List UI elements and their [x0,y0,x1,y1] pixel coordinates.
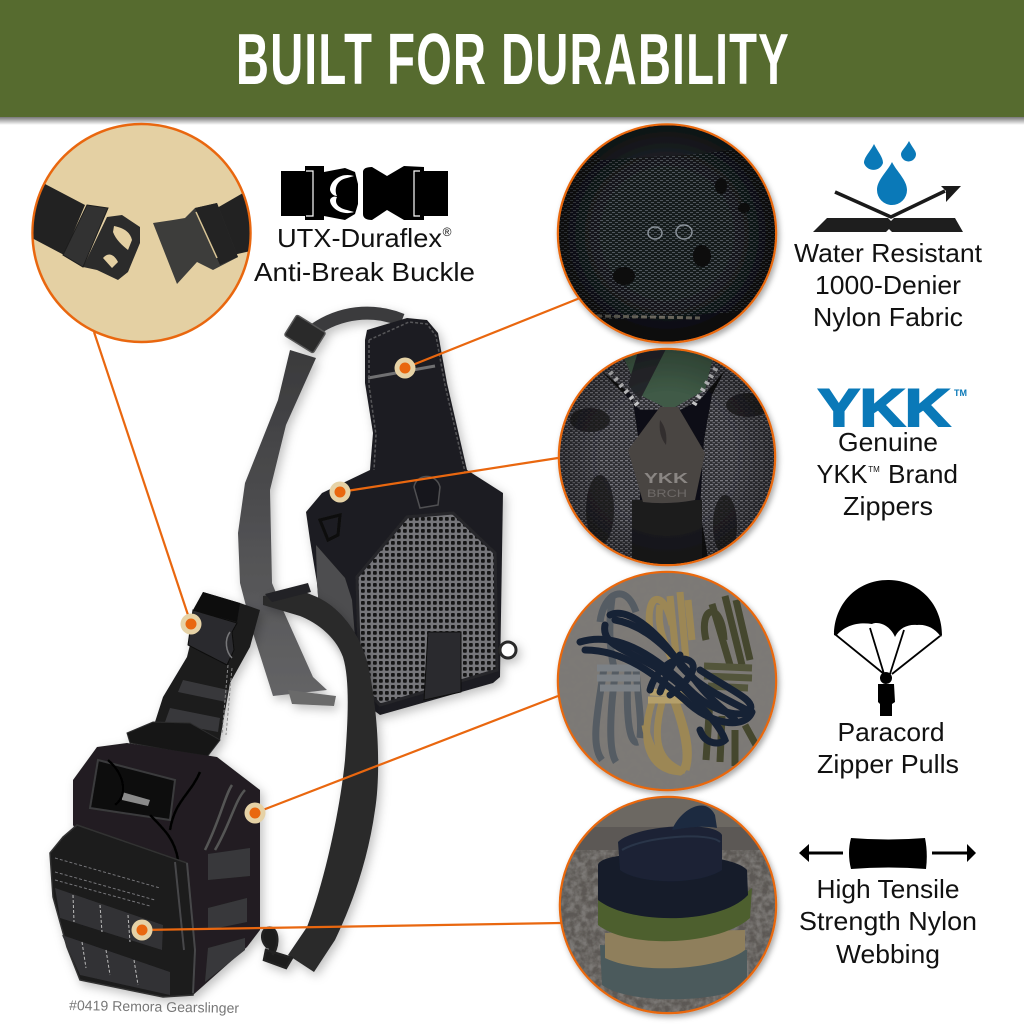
right buckle [153,203,238,284]
strap clip [262,928,292,968]
zipper tape [600,370,725,570]
right arrow [932,852,967,854]
label: paracord: Zipper Pulls [817,749,959,779]
left arrow [809,852,843,854]
label: paracord [817,717,959,779]
slate webbing [600,945,747,999]
YKK logo: YKK [818,379,950,438]
left d-ring [320,515,340,540]
front pocket [50,825,195,997]
label: zippers: Zippers [843,491,933,521]
label: water resistant: 1000-Denier [815,270,961,300]
label: webbing: Strength Nylon [799,906,977,936]
label: buckle: Anti-Break Buckle [254,257,475,287]
tan cord [645,592,692,772]
label: zippers [816,427,958,521]
gray cord [596,594,641,762]
pocket zipper [175,862,195,993]
photo circle: YKK zipper: YKK [644,470,688,487]
left webbing [34,184,85,254]
front bag: remora gearslinger [50,583,378,997]
side d-ring [500,642,516,658]
tensile strength icon [799,838,976,869]
label: paracord: Paracord [838,717,944,747]
zipper pull [628,407,705,503]
olive cord [704,596,756,766]
navy webbing upper [618,826,722,881]
callout: fabric [394,298,580,378]
label: buckle: ® [443,225,452,239]
parachute icon [834,580,942,716]
label: webbing: Webbing [836,939,940,969]
photo circle: buckle [28,124,255,342]
photo circle: water resistant fabric [558,124,778,345]
water drops [613,178,750,285]
velcro patch [90,760,175,820]
water resistant icon [813,141,963,232]
label: zippers: Brand [888,459,958,489]
drops [864,144,883,170]
main compartment [73,743,260,995]
back bag: rear view [238,313,516,715]
label: webbing: High Tensile [816,874,960,904]
label: buckle: UTX-Duraflex [277,223,442,253]
side molle [205,848,250,982]
label: webbing [799,874,977,969]
photo circle: YKK zipper: BRCH [647,488,687,500]
book [813,218,963,232]
product caption: #0419 Remora Gearslinger [69,997,240,1016]
photo circle: YKK zipper [558,345,778,570]
back bag body [306,318,503,715]
pocket molle [55,888,170,995]
header banner [0,0,1024,125]
back bag strap [238,313,402,706]
photo circle: paracord [558,572,778,792]
webbing band [598,126,735,160]
label: zippers: TM [868,465,880,474]
arrow [835,191,945,217]
green webbing [598,888,752,941]
small side buckle [265,583,311,602]
label: zippers: Genuine [838,427,938,457]
navy cord [580,613,752,743]
callout: webbing [132,920,561,940]
label: buckle [254,223,475,287]
mesh panel [357,513,497,705]
belt loop [424,632,461,700]
callout: zipper [330,458,558,502]
carry handle [127,722,220,757]
tan webbing [605,930,745,968]
paracord pulls [108,760,200,860]
slider buckle [284,315,326,353]
label: water resistant: Nylon Fabric [813,302,963,332]
photo circle: webbing [558,797,778,1020]
zipper teeth [610,368,716,408]
left buckle frame [63,205,108,267]
callout: buckle [94,332,202,634]
front strap [263,590,378,972]
navy webbing lower [598,854,748,918]
label: water resistant: Water Resistant [794,238,983,268]
label: water resistant [794,238,983,332]
right webbing [218,194,250,254]
buckle icon [281,166,448,220]
left buckle prongs [83,215,140,280]
background foliage [624,350,712,407]
label: zippers: YKK [816,459,868,489]
side zipper [205,785,245,850]
fabric shadow patches [570,393,770,555]
main buckle [188,592,240,665]
callout: paracord [244,696,558,824]
top d-ring [414,476,440,508]
navy loop [672,806,717,830]
shoulder pad [155,592,260,740]
YKK logo: TM [954,388,967,398]
